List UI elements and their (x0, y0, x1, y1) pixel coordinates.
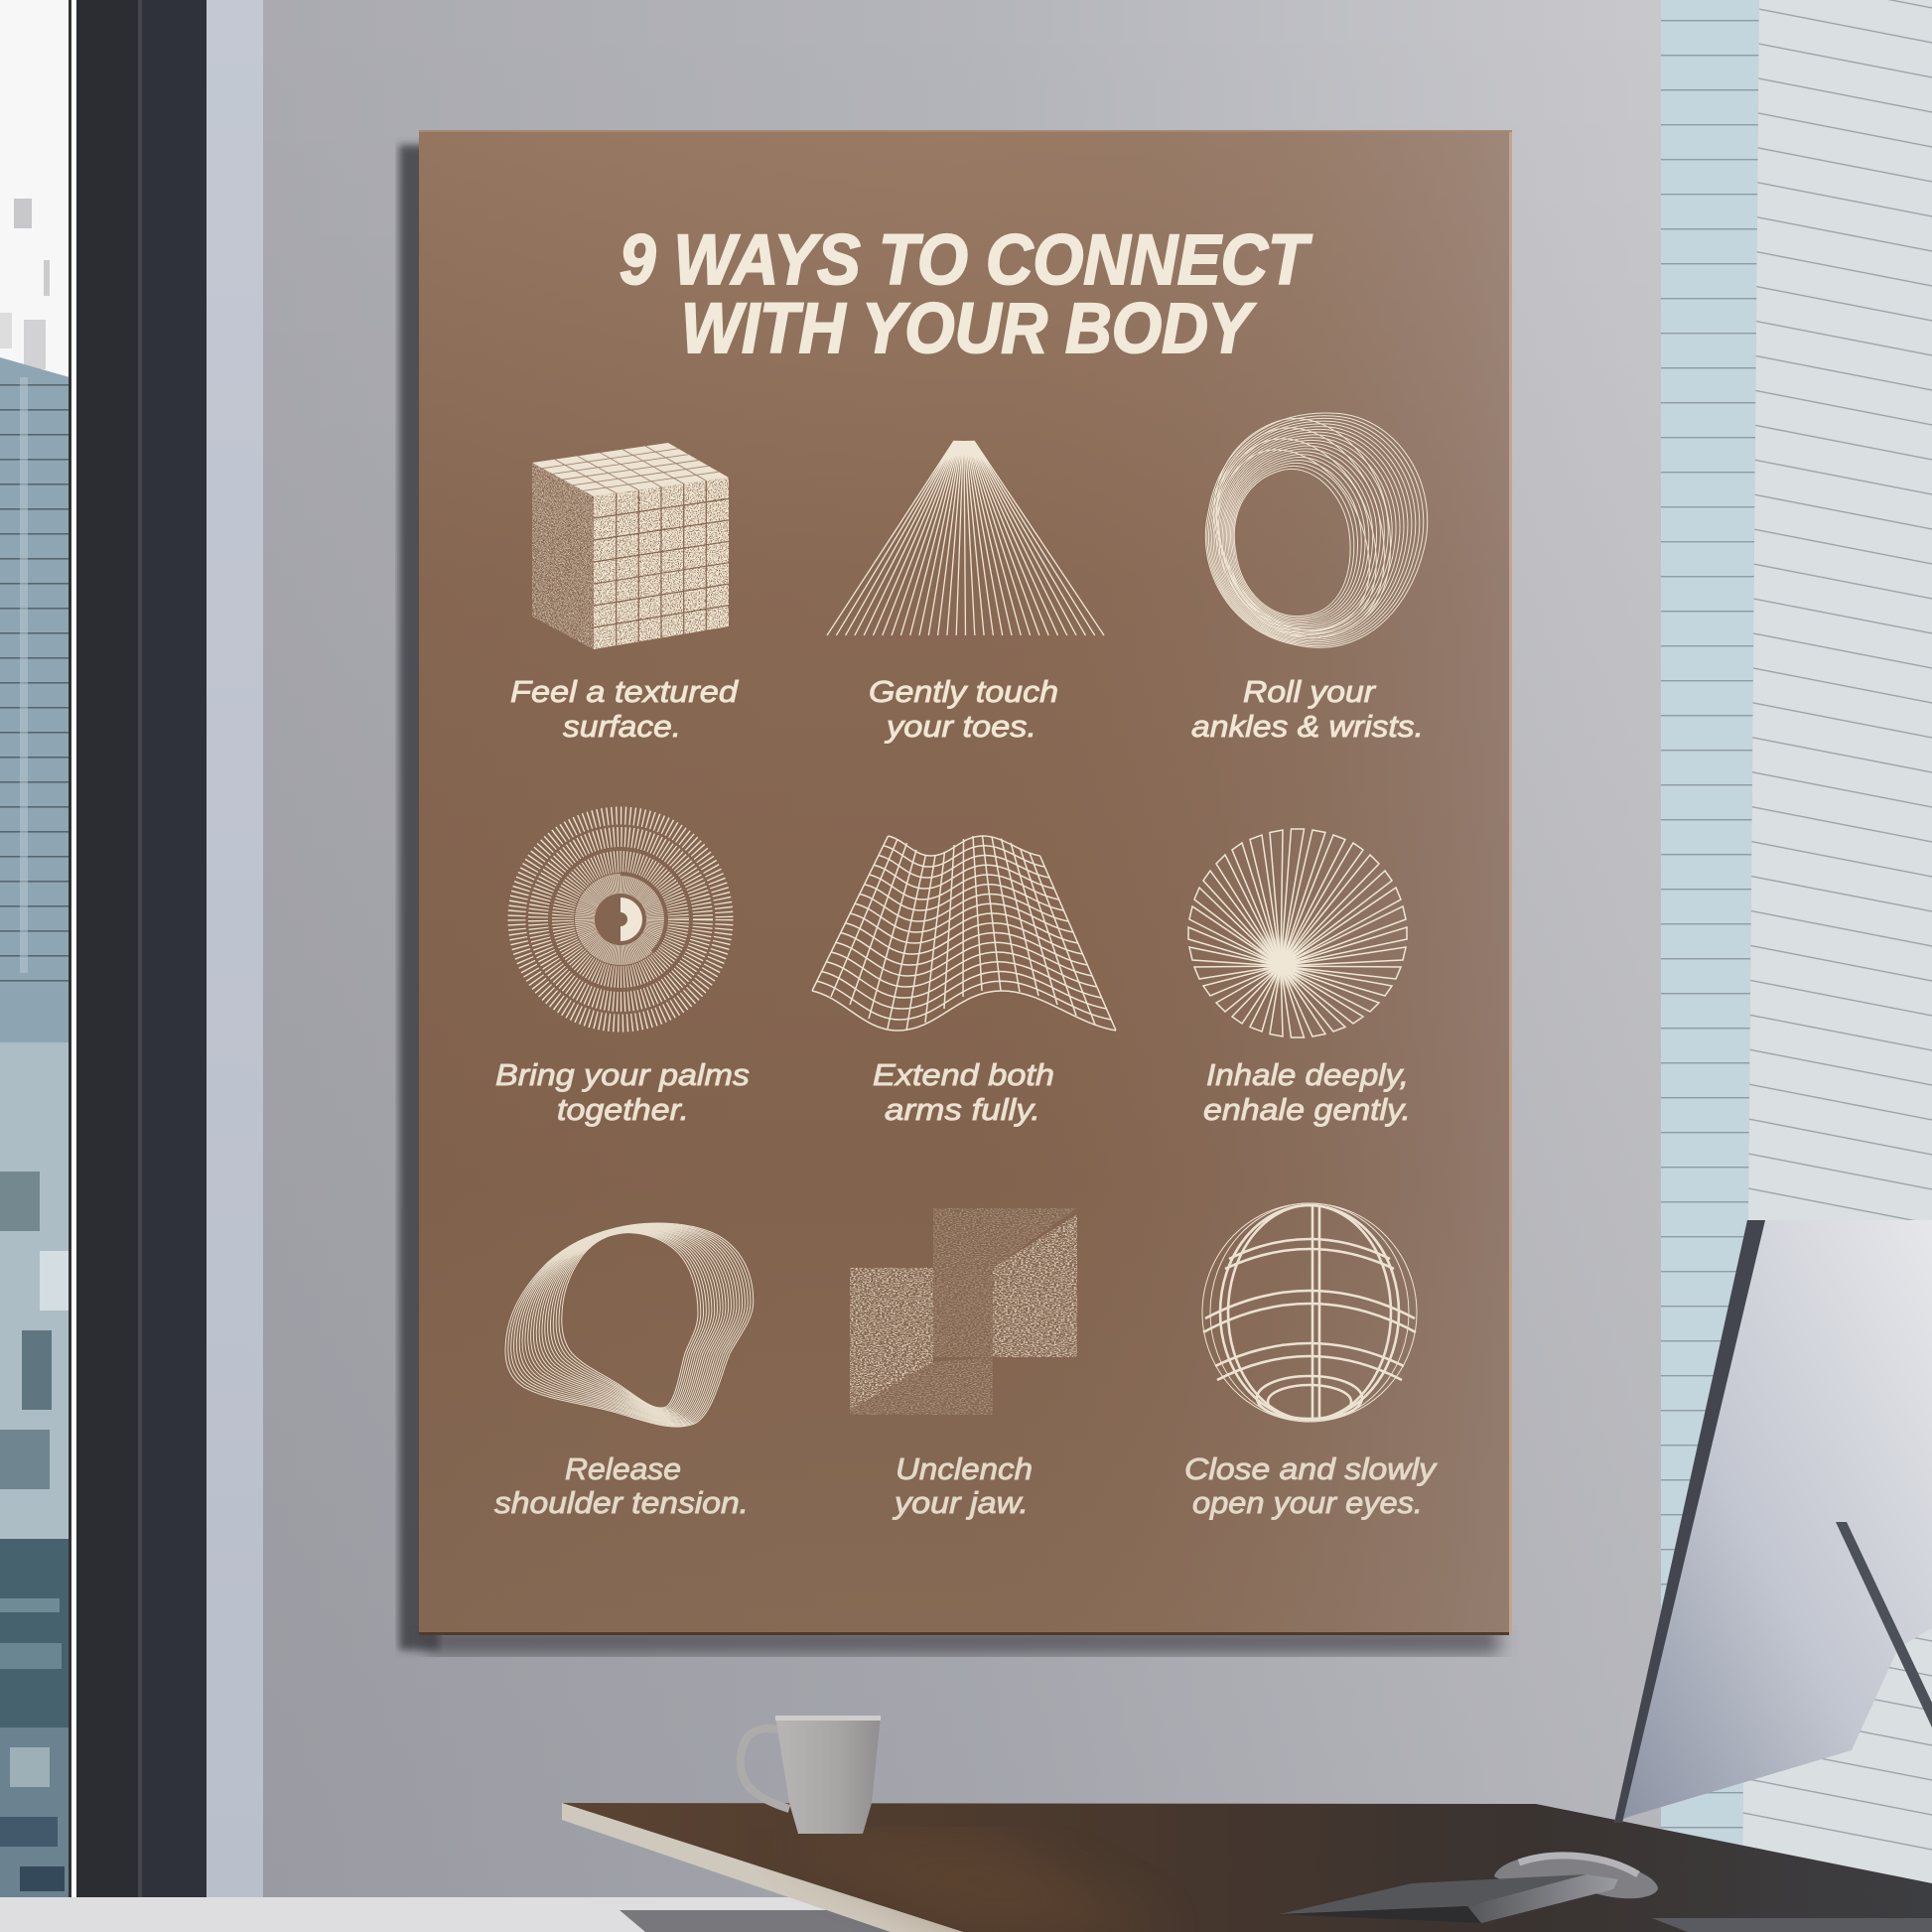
dark window frame (76, 0, 207, 1897)
poster panel (419, 130, 1512, 1635)
window reveal (207, 0, 263, 1897)
caption: extend both arms fully: Extend both (873, 1057, 1054, 1092)
caption: unclench your jaw: your jaw. (893, 1485, 1029, 1520)
icon: wireframe sphere (1202, 1203, 1417, 1422)
caption: close and slowly open your eyes: Close and slowly (1184, 1451, 1439, 1486)
title (620, 221, 1312, 368)
caption: roll your ankles and wrists: ankles & wrists. (1191, 709, 1424, 744)
title: WITH YOUR BODY (681, 290, 1256, 368)
icon: overlapping halftone squares (850, 1208, 1077, 1415)
caption: bring your palms together (495, 1057, 750, 1127)
caption: gently touch your toes: Gently touch (869, 674, 1058, 709)
computer monitor back and stand (1614, 1220, 1932, 1823)
caption: inhale deeply, enhale gently: Inhale deeply, (1206, 1057, 1409, 1092)
mug (741, 1716, 881, 1834)
caption: close and slowly open your eyes: open your eyes. (1192, 1485, 1423, 1520)
caption: inhale deeply, enhale gently (1203, 1057, 1411, 1127)
caption: release shoulder tension: shoulder tension. (494, 1485, 749, 1520)
mouse (1494, 1854, 1658, 1898)
icon: grainy cube (532, 443, 729, 649)
caption: unclench your jaw (893, 1451, 1033, 1520)
icon: twisted line ring (1187, 394, 1445, 664)
caption: close and slowly open your eyes (1184, 1451, 1439, 1520)
mouse pad (1652, 1918, 1932, 1932)
icon: wavy blob ring (505, 1205, 754, 1455)
caption: gently touch your toes (869, 674, 1058, 744)
icon: radiating line pyramid (827, 441, 1104, 635)
left window with city view (0, 0, 76, 1897)
caption: roll your ankles and wrists: Roll your (1243, 674, 1377, 709)
caption: extend both arms fully (873, 1057, 1054, 1127)
icon: spiralling ray fan (1188, 829, 1407, 1037)
icon: wavy perspective mesh (812, 836, 1116, 1031)
caption: bring your palms together: together. (557, 1092, 689, 1127)
caption: extend both arms fully: arms fully. (885, 1092, 1040, 1127)
keyboard (1280, 1874, 1618, 1923)
floor strip and sideboard (0, 1897, 993, 1932)
desk (562, 1803, 1932, 1932)
caption: feel a textured surface: Feel a textured (510, 674, 740, 709)
icon: concentric radial tick rings (516, 816, 725, 1023)
caption: gently touch your toes: your toes. (885, 709, 1036, 744)
caption: inhale deeply, enhale gently: enhale gently. (1203, 1092, 1411, 1127)
right window building (1661, 0, 1932, 1886)
title: 9 WAYS TO CONNECT (620, 221, 1312, 300)
caption: feel a textured surface: surface. (563, 709, 681, 744)
poster shadow (399, 145, 1499, 1654)
caption: unclench your jaw: Unclench (896, 1451, 1033, 1486)
caption: bring your palms together: Bring your palms (495, 1057, 750, 1092)
caption: roll your ankles and wrists (1191, 674, 1424, 744)
caption: release shoulder tension: Release (565, 1451, 681, 1486)
caption: release shoulder tension (494, 1451, 749, 1520)
caption: feel a textured surface (510, 674, 740, 744)
